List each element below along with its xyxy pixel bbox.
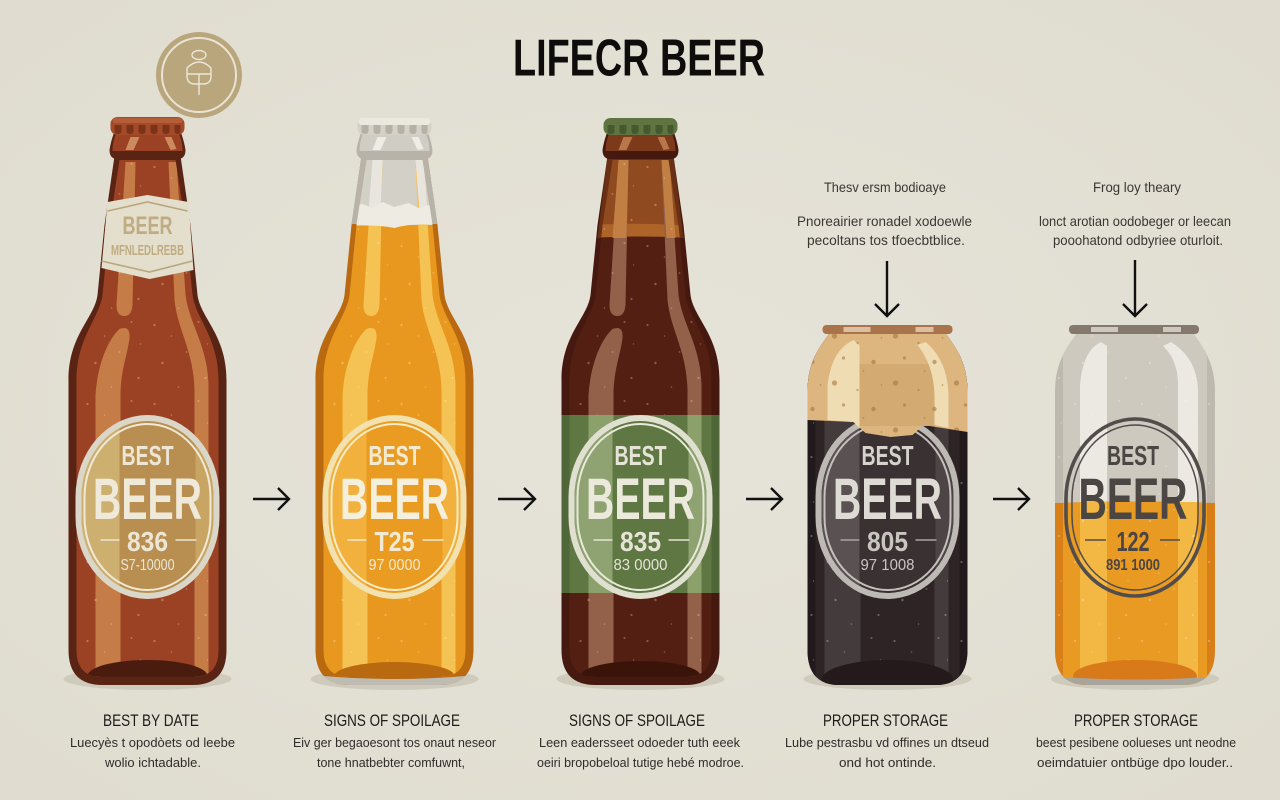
shadow: [556, 668, 724, 690]
round label: BEER: [93, 467, 202, 532]
bottle 2: golden beer with foam: [310, 118, 478, 690]
shadow: [804, 668, 972, 690]
round label: T25: [374, 526, 414, 557]
round label: 805: [867, 526, 908, 557]
can body: [1055, 330, 1215, 692]
note: can 2: [1039, 179, 1231, 248]
green band: [562, 415, 720, 593]
arrow: down to can 2: [1123, 260, 1147, 316]
caption 5: beest pesibene oolueses unt neodne: [1036, 735, 1236, 750]
caption 3: oeiri bropobeloal tutige hebé modroe.: [537, 755, 744, 770]
lid: [1069, 325, 1199, 334]
round label: BEER: [340, 467, 449, 532]
round label: BEST: [1107, 440, 1159, 471]
caption 2: [293, 712, 497, 770]
caption 4: [785, 712, 989, 770]
note: can 1: Thesv ersm bodioaye: [824, 179, 946, 195]
round label: BEST: [862, 440, 914, 471]
bottle glass: [560, 134, 720, 691]
round label: [322, 415, 466, 599]
note: can 2: lonct arotian oodobeger or leecan: [1039, 213, 1231, 229]
cap: [110, 117, 184, 135]
caption 3: [537, 712, 744, 770]
round label: 122: [1116, 526, 1150, 557]
arrow 1: [253, 488, 289, 510]
caption 3: Leen eadersseet odoeder tuth eeek: [539, 735, 740, 750]
bottle 3: dark beer with green band: [556, 118, 724, 691]
lid: [822, 325, 952, 334]
neck label: [102, 195, 194, 279]
caption 1: [70, 712, 235, 770]
note: can 2: Frog loy theary: [1093, 179, 1181, 195]
note: can 2: pooohatond odbyriee oturloit.: [1053, 232, 1223, 248]
icon: badge with beer glass: [156, 32, 242, 118]
caption 5: oeimdatuier ontbüge dpo louder..: [1037, 755, 1233, 770]
round label: 97 0000: [368, 557, 421, 574]
neck label: MFNLEDLREBB: [111, 242, 184, 259]
arrow 3: [746, 488, 782, 510]
round label: [76, 415, 220, 599]
note: can 1: [797, 179, 972, 248]
round label: [1066, 419, 1204, 596]
cap: [358, 118, 432, 135]
caption 2: Eiv ger begaoesont tos onaut neseor: [293, 735, 497, 750]
round label: BEER: [1078, 467, 1188, 532]
shadow: [1051, 668, 1219, 690]
arrow 2: [498, 488, 535, 510]
round label: 836: [127, 526, 168, 557]
caption 2: SIGNS OF SPOILAGE: [324, 712, 460, 730]
round label: BEST: [614, 440, 666, 471]
round label: 83 0000: [614, 557, 668, 574]
shadow: [64, 668, 232, 690]
arrow: down to can 1: [875, 261, 899, 316]
round label: BEST: [122, 440, 174, 471]
round label: [816, 415, 960, 599]
bottle glass: [314, 134, 474, 690]
arrow 4: [993, 488, 1029, 510]
caption 4: ond hot ontinde.: [839, 755, 936, 770]
round label: S7-10000: [120, 557, 175, 574]
cap: [604, 118, 678, 135]
foam: [808, 330, 968, 437]
caption 3: SIGNS OF SPOILAGE: [569, 712, 705, 730]
caption 4: PROPER STORAGE: [823, 712, 948, 730]
note: can 1: Pnoreairier ronadel xodoewle: [797, 213, 972, 229]
round label: 891 1000: [1106, 557, 1160, 574]
caption 5: [1036, 712, 1236, 770]
caption 1: Luecyès t opodòets od leebe: [70, 735, 235, 750]
caption 1: wolio ichtadable.: [104, 755, 201, 770]
round label: BEER: [586, 467, 695, 532]
note: can 1: pecoltans tos tfoecbtblice.: [807, 232, 965, 248]
title: LIFECR BEER: [513, 30, 765, 88]
can 2: half-full clear can: [1051, 325, 1219, 692]
can 1: dark beer with foam: [804, 325, 972, 700]
caption 2: tone hnatbebter comfuwnt,: [317, 755, 465, 770]
round label: BEST: [368, 440, 420, 471]
caption 4: Lube pestrasbu vd offines un dtseud: [785, 735, 989, 750]
round label: BEER: [833, 467, 942, 532]
caption 5: PROPER STORAGE: [1074, 712, 1198, 730]
can body: [808, 330, 968, 700]
neck label: BEER: [122, 212, 172, 240]
bottle 1: brown with paper label: [64, 117, 232, 692]
round label: 97 1008: [860, 557, 915, 574]
shadow: [310, 668, 478, 690]
round label: [568, 415, 712, 599]
caption 1: BEST BY DATE: [103, 712, 199, 730]
round label: 835: [620, 526, 661, 557]
bottle glass: [68, 134, 228, 692]
